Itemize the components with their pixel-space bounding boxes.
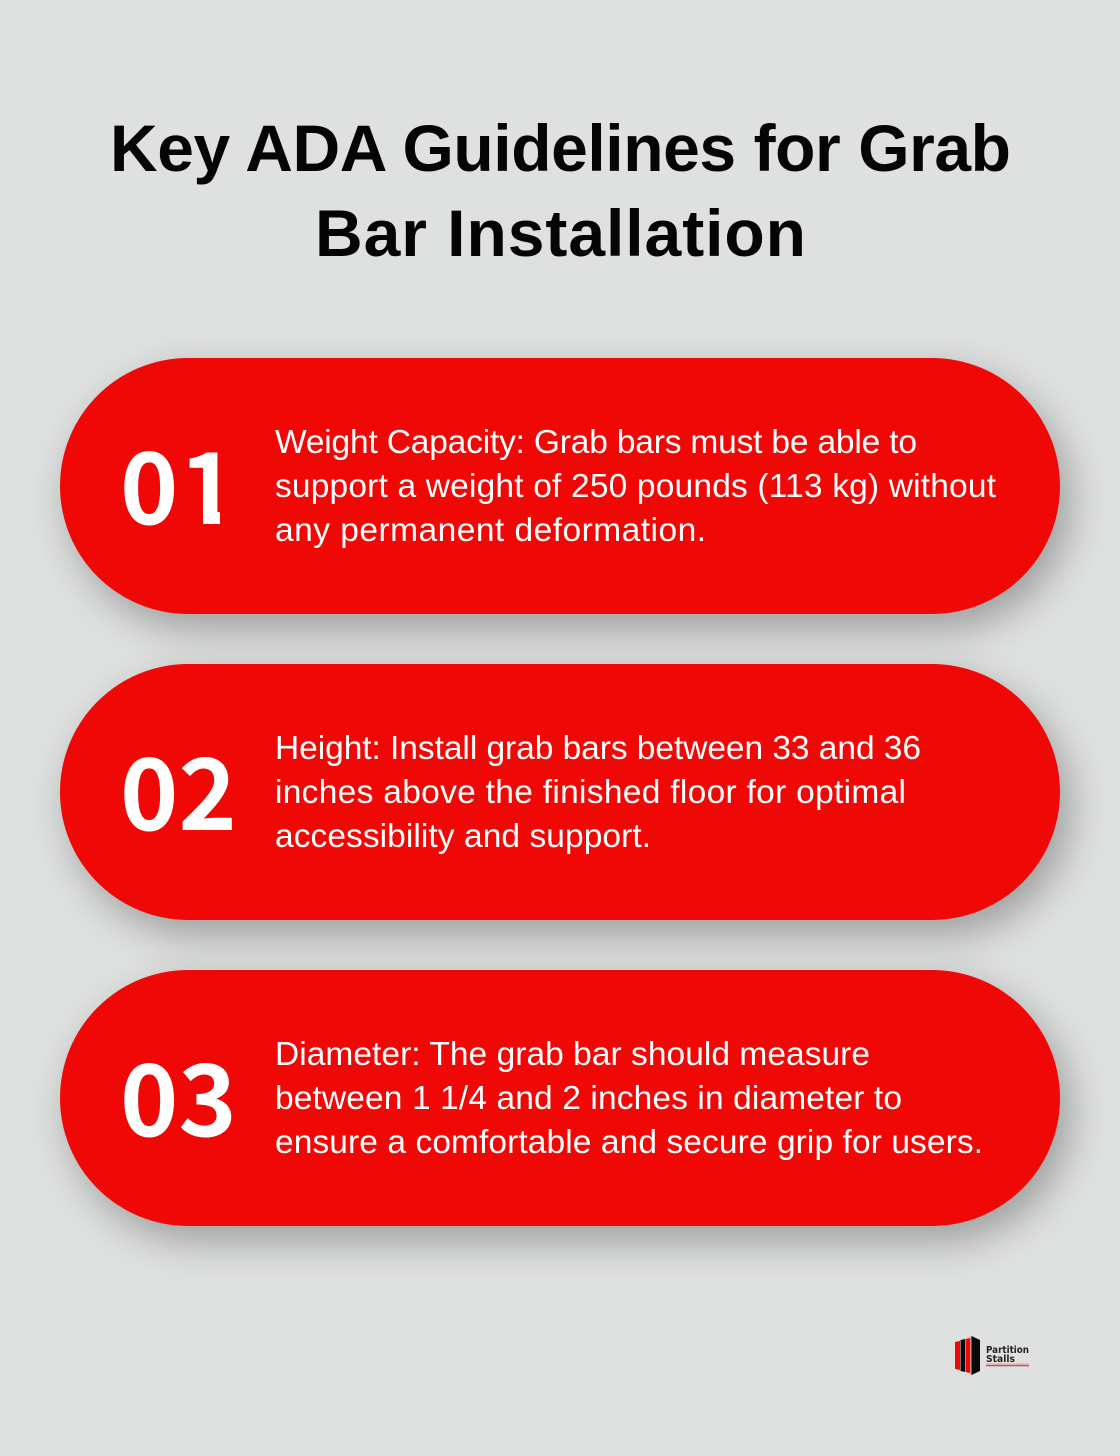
title: [110, 111, 1011, 270]
text: height description: Height: Install grab bars between 33 and 36: [275, 730, 921, 767]
text: height description: inches above the finished floor for optimal: [275, 774, 906, 811]
number 02: 02: [120, 715, 237, 859]
title: Key ADA Guidelines for Grab: [110, 111, 1011, 185]
text: weight capacity description: any permanent deformation.: [275, 512, 706, 549]
number 01: 1: [179, 409, 237, 553]
logo: Partition Stalls: Partition: [986, 1345, 1029, 1356]
title: Bar Installation: [315, 196, 806, 270]
text: weight capacity description: support a weight of 250 pounds (113 kg) without: [275, 468, 997, 505]
number 01: [124, 451, 220, 526]
panel: diameter: [60, 970, 1060, 1226]
text: weight capacity description: [275, 424, 997, 549]
panel: height: [60, 664, 1060, 920]
text: diameter description: [275, 1036, 983, 1161]
logo: Partition Stalls: Stalls: [986, 1354, 1015, 1365]
text: diameter description: between 1 1/4 and 2 inches in diameter to: [275, 1080, 902, 1117]
number 03: 03: [120, 1021, 237, 1165]
text: height description: accessibility and support.: [275, 818, 651, 855]
number 01: 0: [120, 409, 178, 553]
text: diameter description: ensure a comfortable and secure grip for users.: [275, 1124, 983, 1161]
text: height description: [275, 730, 921, 855]
panel: weight capacity: [60, 358, 1060, 614]
text: diameter description: Diameter: The grab bar should measure: [275, 1036, 870, 1073]
text: weight capacity description: Weight Capacity: Grab bars must be able to: [275, 424, 917, 461]
